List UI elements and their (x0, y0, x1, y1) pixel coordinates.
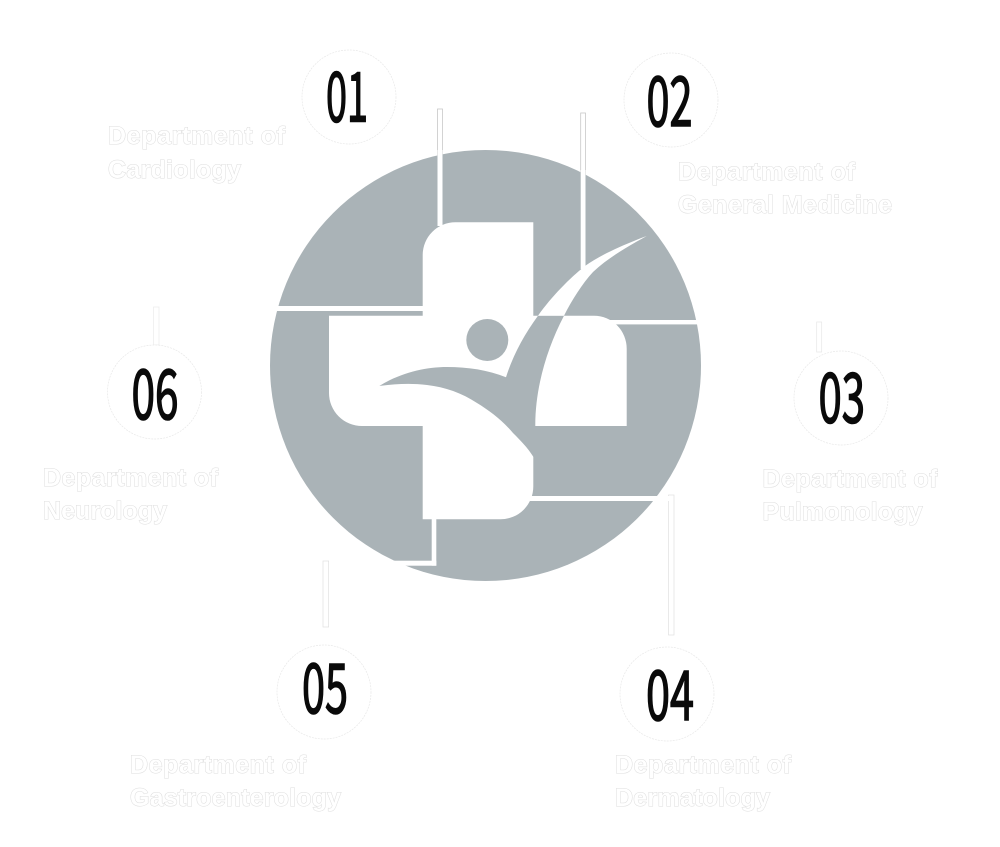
badge 06 (108, 339, 202, 439)
item 03: pulmonology (762, 342, 938, 526)
badge 02: 02 (646, 46, 692, 146)
badge 01: 01 (326, 42, 368, 142)
label 04: Department of (615, 751, 792, 779)
label 06 (43, 464, 219, 525)
central medical emblem (270, 150, 701, 581)
label 04: Dermatology (615, 784, 770, 812)
figure head (466, 319, 508, 361)
badge 04 (620, 640, 714, 741)
badge 03: 03 (818, 342, 865, 442)
label 02: Department of (678, 158, 856, 186)
label 01 (108, 122, 286, 184)
label 03 (762, 465, 938, 526)
emblem disc (270, 150, 701, 581)
item 04: dermatology (615, 640, 792, 812)
label 06: Department of (43, 464, 219, 492)
figure raised arm swoosh (538, 236, 647, 316)
connector outlines (154, 109, 822, 635)
label 01: Cardiology (108, 156, 241, 184)
item 06: neurology (43, 339, 219, 525)
item 02: general medicine (624, 46, 892, 219)
item 01: cardiology (108, 42, 396, 184)
badge 04: 04 (646, 640, 694, 740)
label 05 (130, 751, 341, 812)
badge 01 (302, 42, 396, 144)
label 03: Department of (762, 465, 938, 493)
white separator lines (262, 150, 706, 566)
figure body (379, 316, 564, 459)
white medical cross (329, 222, 627, 519)
label 06: Neurology (43, 497, 167, 525)
label 04 (615, 751, 792, 812)
label 02 (678, 158, 892, 219)
badge 03 (794, 342, 888, 445)
badge 05: 05 (302, 633, 348, 733)
label 05: Department of (130, 751, 307, 779)
label 05: Gastroenterology (130, 784, 341, 812)
label 02: General Medicine (678, 191, 892, 219)
badge 05 (277, 633, 371, 739)
badge 06: 06 (132, 339, 178, 439)
item 05: gastroenterology (130, 633, 371, 812)
label 01: Department of (108, 122, 286, 150)
label 03: Pulmonology (762, 498, 923, 526)
